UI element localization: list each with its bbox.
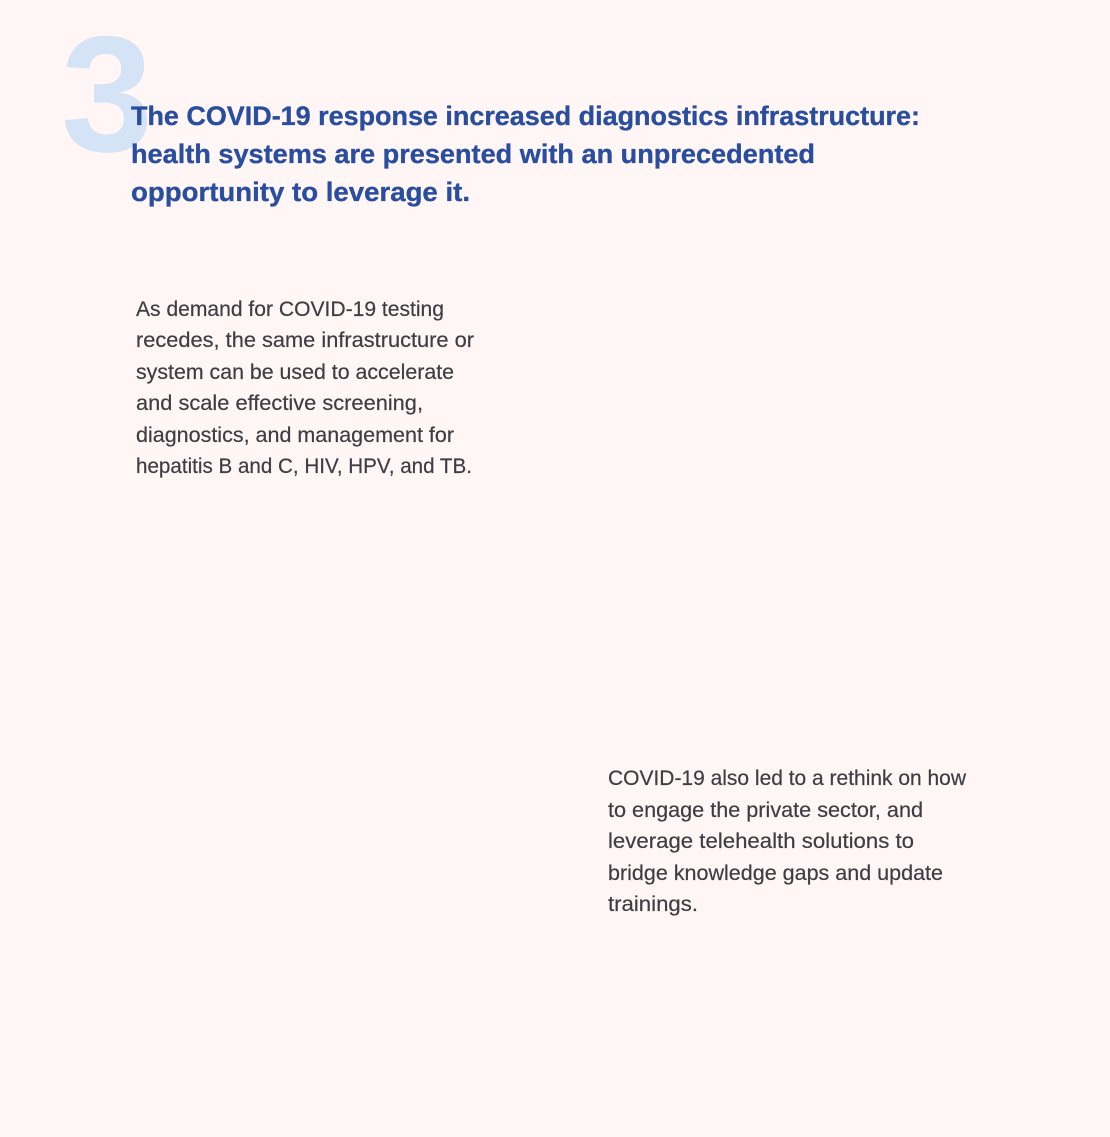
text block: repurposing testing infrastructure: system can be used to accelerate: [136, 361, 454, 384]
heading: The COVID-19 response increased diagnostics infrastructure:: [131, 101, 920, 131]
text block: repurposing testing infrastructure: recedes, the same infrastructure or: [136, 329, 474, 352]
heading: health systems are presented with an unprecedented: [131, 139, 815, 169]
text block: repurposing testing infrastructure: and scale effective screening,: [136, 392, 423, 415]
heading: [131, 101, 920, 207]
text block: private sector and telehealth: bridge knowledge gaps and update: [608, 862, 943, 885]
heading: opportunity to leverage it.: [131, 177, 470, 207]
text block: repurposing testing infrastructure: As demand for COVID-19 testing: [136, 298, 444, 321]
text block: repurposing testing infrastructure: [136, 298, 474, 478]
text block: private sector and telehealth: to engage the private sector, and: [608, 799, 923, 822]
text block: repurposing testing infrastructure: hepatitis B and C, HIV, HPV, and TB.: [136, 455, 472, 478]
text block: private sector and telehealth: COVID-19 also led to a rethink on how: [608, 767, 967, 790]
text block: private sector and telehealth: leverage telehealth solutions to: [608, 830, 914, 853]
text block: repurposing testing infrastructure: diagnostics, and management for: [136, 424, 454, 447]
large section number 3: 3: [61, 2, 153, 186]
text block: private sector and telehealth: trainings.: [608, 893, 698, 916]
text block: private sector and telehealth: [608, 767, 967, 916]
